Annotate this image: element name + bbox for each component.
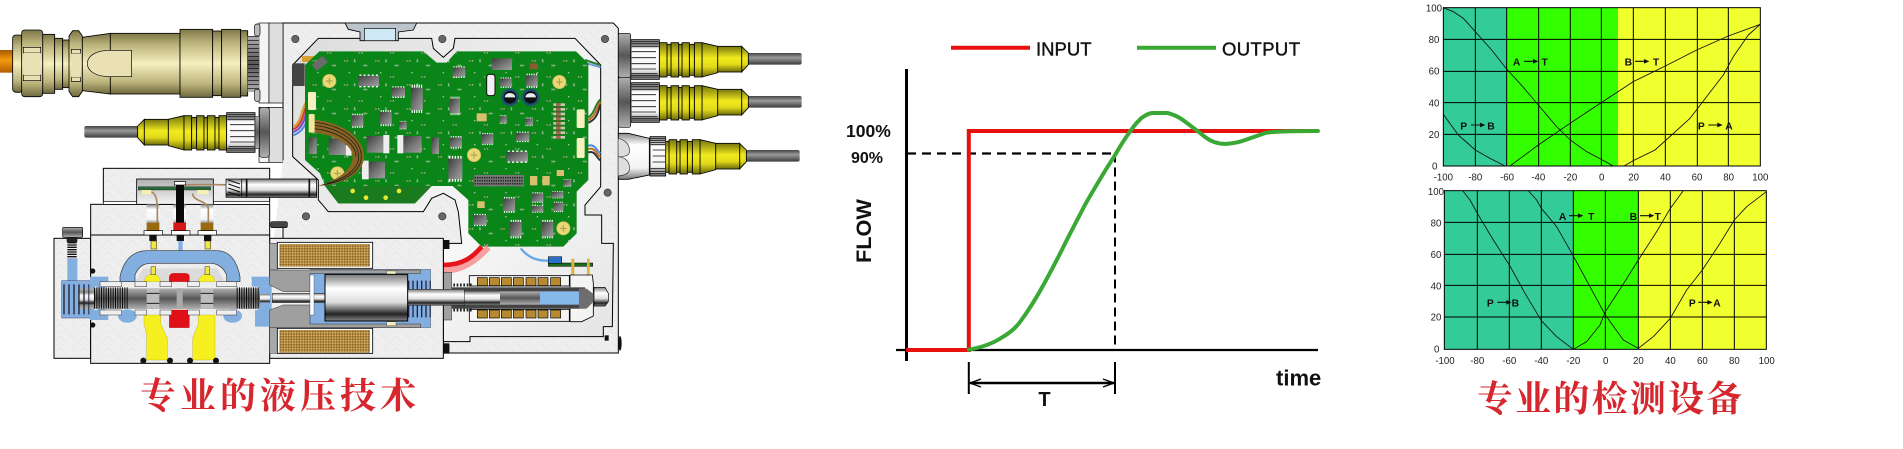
- top clip: [345, 23, 417, 41]
- yellow pads: [350, 189, 401, 200]
- housing mounting holes: [292, 35, 611, 220]
- upper flow chart: -80: [1468, 172, 1482, 183]
- lower flow chart: 80: [1729, 356, 1740, 367]
- upper flow chart: 40: [1660, 172, 1671, 183]
- upper flow chart: P: [1460, 121, 1467, 132]
- spool and springs: [63, 282, 270, 315]
- black screw caps beside block: [271, 222, 287, 228]
- upper flow chart: 80: [1429, 35, 1439, 46]
- feedback pcb: [548, 257, 593, 275]
- hydraulic oil channels blue: [62, 251, 431, 328]
- position sensor coil assembly: [420, 241, 622, 351]
- upper flow chart: 100: [1752, 172, 1768, 183]
- lower flow chart: -40: [1534, 356, 1548, 367]
- input step trace: [906, 131, 1318, 350]
- connector: large beige cable plug: [0, 24, 260, 101]
- panel: hydraulic servo valve cross-section: [0, 23, 802, 364]
- upper flow chart: -60: [1500, 172, 1514, 183]
- panel: flow characteristic charts: [1426, 4, 1775, 367]
- integrated circuits: [309, 56, 571, 237]
- panel: step response chart: [846, 39, 1321, 411]
- lower flow chart: 40: [1665, 356, 1676, 367]
- x axis title: time: [1276, 366, 1321, 390]
- resistors and gold components: [477, 63, 565, 208]
- lower flow chart: 100: [1759, 356, 1775, 367]
- upper flow chart: 60: [1692, 172, 1702, 183]
- upper flow chart: -100: [1434, 172, 1453, 183]
- lower flow chart: A: [1713, 298, 1721, 309]
- upper flow chart: 100: [1426, 4, 1442, 15]
- lvdt rod sensor: [226, 179, 317, 197]
- percent labels: 100%: [846, 121, 891, 141]
- lower flow chart: T: [1588, 212, 1595, 223]
- lower flow chart: 60: [1431, 250, 1441, 261]
- pilot sensor assembly: [137, 179, 317, 251]
- board connector strip: [474, 175, 524, 186]
- upper flow chart: 20: [1429, 130, 1439, 141]
- connector: left yellow sensor plug: [84, 107, 269, 157]
- percent labels: [846, 121, 891, 167]
- lower flow chart: 0: [1603, 356, 1608, 367]
- connectors: right yellow sensor plugs: [618, 33, 802, 179]
- percent labels: 90%: [851, 150, 883, 167]
- lower flow chart: 0: [1434, 345, 1439, 356]
- upper flow chart: 0: [1599, 172, 1604, 183]
- flexible ribbon cable: [309, 119, 364, 186]
- circuit board: [305, 51, 588, 247]
- internal chamber: [293, 38, 613, 342]
- time interval T marker: [969, 362, 1115, 411]
- lower flow chart: T: [1655, 212, 1662, 223]
- upper flow chart: 0: [1432, 161, 1437, 172]
- lower flow chart: 60: [1697, 356, 1708, 367]
- lower flow chart: -60: [1502, 356, 1516, 367]
- upper flow chart: A: [1725, 121, 1733, 132]
- legend: OUTPUT: [1222, 39, 1300, 60]
- caption: hydraulic technology: 专业的液压技术: [140, 376, 420, 416]
- upper flow chart: 40: [1429, 98, 1439, 109]
- coil windings: [270, 240, 449, 354]
- legend: INPUT: [1036, 39, 1092, 60]
- lower flow chart: 100: [1428, 187, 1444, 198]
- valve body blocks: [54, 168, 464, 364]
- pressure and tank ports: [90, 267, 219, 364]
- lower flow chart: 40: [1431, 281, 1441, 292]
- upper flow chart: P: [1698, 121, 1705, 132]
- lower flow chart: [1428, 187, 1775, 367]
- lower flow chart: B: [1512, 298, 1519, 309]
- solenoid and coil housing: [420, 241, 622, 351]
- upper flow chart: A: [1513, 57, 1521, 68]
- lower flow chart: A: [1559, 212, 1567, 223]
- upper flow chart: [1426, 4, 1768, 183]
- upper flow chart: 60: [1429, 67, 1439, 78]
- lower flow chart: -80: [1470, 356, 1484, 367]
- upper flow chart: 20: [1628, 172, 1639, 183]
- caption: testing equipment: 专业的检测设备: [1477, 379, 1744, 419]
- y axis title: FLOW: [851, 199, 876, 263]
- capacitors: [487, 74, 539, 106]
- lower flow chart: P: [1487, 298, 1494, 309]
- lower flow chart: -20: [1566, 356, 1580, 367]
- lower flow chart: 20: [1633, 356, 1644, 367]
- wiring ribbons: [293, 60, 601, 161]
- upper flow chart: T: [1542, 57, 1549, 68]
- mounting screw: [63, 227, 83, 281]
- upper flow chart: 80: [1723, 172, 1734, 183]
- lower flow chart: 80: [1431, 218, 1441, 229]
- armature and push rod: [272, 271, 464, 326]
- axes: [896, 69, 1318, 361]
- lower flow chart: B: [1630, 212, 1637, 223]
- upper flow chart: -40: [1531, 172, 1545, 183]
- red and blue internal wires: [443, 247, 548, 271]
- upper flow chart: B: [1625, 57, 1632, 68]
- upper flow chart: -20: [1563, 172, 1577, 183]
- output response trace: [969, 113, 1318, 350]
- upper flow chart: T: [1653, 57, 1660, 68]
- lower flow chart: -100: [1435, 356, 1455, 367]
- lower flow chart: P: [1689, 298, 1696, 309]
- lower flow chart: 20: [1431, 313, 1441, 324]
- time interval T marker: T: [1038, 389, 1051, 411]
- guide lines 90 percent: [907, 154, 1115, 350]
- upper flow chart: B: [1487, 121, 1495, 132]
- trim screws: [323, 74, 570, 235]
- legend: [951, 39, 1300, 60]
- electronics housing body: [259, 23, 618, 353]
